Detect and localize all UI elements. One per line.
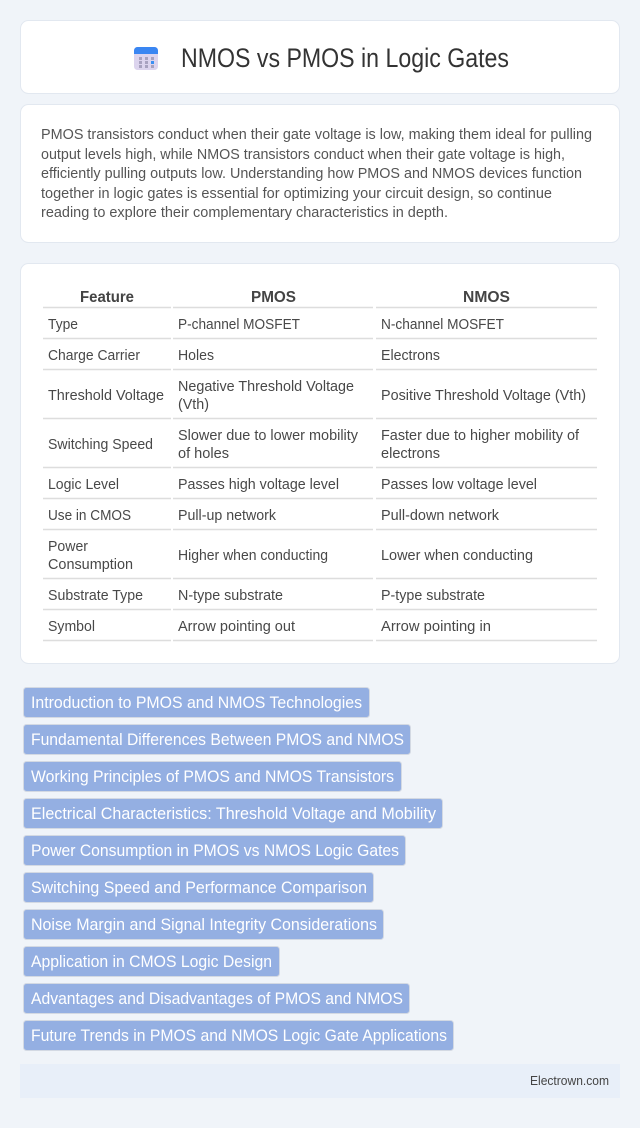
row: logic level [48, 477, 537, 493]
row: power consumption: Consumption [48, 557, 133, 573]
row: type: P-channel MOSFET [178, 317, 300, 333]
row: switching speed: electrons [381, 446, 440, 462]
text block: introduction paragraph: PMOS transistors conduct when their gate voltage is low, making them ideal for pulling [41, 126, 592, 143]
topic button 10 [24, 1020, 454, 1050]
row: switching speed: Switching Speed [48, 437, 153, 453]
row: logic level: Logic Level [48, 477, 119, 493]
row: switching speed: Slower due to lower mobility [178, 428, 359, 444]
topic button 4 [24, 798, 442, 828]
panel: title header [20, 20, 620, 94]
row: logic level: Passes high voltage level [178, 477, 339, 493]
topic button 2 [24, 724, 410, 754]
row: substrate type: Substrate Type [48, 588, 143, 604]
table header row: PMOS [251, 289, 296, 306]
row: switching speed [48, 428, 580, 462]
row: charge carrier: Holes [178, 348, 214, 364]
row: switching speed: of holes [178, 446, 229, 462]
topic button 6 [24, 872, 374, 902]
topic button 10: Future Trends in PMOS and NMOS Logic Gate Applications [31, 1026, 447, 1045]
row: logic level: Passes low voltage level [381, 477, 537, 493]
row: substrate type [48, 588, 485, 604]
text block: introduction paragraph: reading to explore their complementary characteristics in depth. [41, 204, 448, 221]
text block: introduction paragraph: efficiently pulling outputs low. Understanding how PMOS and NMOS devices function [41, 165, 582, 182]
row: type [48, 317, 504, 333]
row: power consumption: Power [48, 539, 88, 555]
topic button 8 [24, 946, 280, 976]
row: use in CMOS: Pull-down network [381, 508, 500, 524]
topic button 5 [24, 836, 406, 866]
table header row: NMOS [463, 289, 510, 306]
row: substrate type: P-type substrate [381, 588, 485, 604]
topic button 4: Electrical Characteristics: Threshold Voltage and Mobility [31, 804, 437, 823]
row: symbol: Arrow pointing out [178, 619, 295, 635]
row: threshold voltage: Threshold Voltage [48, 388, 164, 404]
row: substrate type: N-type substrate [178, 588, 283, 604]
row: charge carrier: Electrons [381, 348, 440, 364]
row: type: N-channel MOSFET [381, 317, 504, 333]
row: power consumption: Lower when conducting [381, 548, 533, 564]
topic button 8: Application in CMOS Logic Design [31, 952, 272, 971]
topic button 5: Power Consumption in PMOS vs NMOS Logic Gates [31, 841, 399, 860]
panel: introduction [20, 104, 620, 242]
row: use in CMOS: Pull-up network [178, 508, 277, 524]
table header row [80, 289, 510, 306]
topic button 9 [24, 984, 410, 1014]
topic button 3 [24, 762, 402, 792]
icon: calendar grid [134, 47, 158, 70]
table header row: Feature [80, 289, 134, 306]
topic button 9: Advantages and Disadvantages of PMOS and NMOS [31, 989, 403, 1008]
panel: comparison table [20, 264, 620, 664]
row: threshold voltage: Positive Threshold Voltage (Vth) [381, 388, 586, 404]
row: threshold voltage: (Vth) [178, 397, 209, 413]
topic list [24, 688, 454, 1050]
row: threshold voltage [48, 379, 586, 413]
row: charge carrier [48, 348, 440, 364]
row: use in CMOS [48, 508, 500, 524]
topic button 7: Noise Margin and Signal Integrity Considerations [31, 915, 377, 934]
row: type: Type [48, 317, 78, 333]
topic button 6: Switching Speed and Performance Comparison [31, 878, 367, 897]
topic button 2: Fundamental Differences Between PMOS and NMOS [31, 730, 404, 749]
topic button 3: Working Principles of PMOS and NMOS Transistors [31, 767, 394, 786]
row: symbol [48, 619, 491, 635]
text block: introduction paragraph: together in logic gates is essential for optimizing your circuit design, so continue [41, 185, 552, 202]
topic button 7 [24, 910, 384, 940]
row: power consumption [48, 539, 533, 573]
row: power consumption: Higher when conducting [178, 548, 328, 564]
row: symbol: Arrow pointing in [381, 619, 491, 635]
title: NMOS vs PMOS in Logic Gates [181, 43, 509, 73]
text block: introduction paragraph: output levels high, while NMOS transistors conduct when their gate voltage is high, [41, 146, 565, 163]
topic button 1 [24, 688, 370, 718]
row: use in CMOS: Use in CMOS [48, 508, 131, 524]
topic button 1: Introduction to PMOS and NMOS Technologies [31, 693, 362, 712]
text block: introduction paragraph [41, 126, 592, 221]
footer: Electrown.com [530, 1073, 609, 1088]
footer [20, 1064, 620, 1098]
row: switching speed: Faster due to higher mobility of [381, 428, 580, 444]
row: threshold voltage: Negative Threshold Voltage [178, 379, 354, 395]
row: symbol: Symbol [48, 619, 95, 635]
row: charge carrier: Charge Carrier [48, 348, 140, 364]
